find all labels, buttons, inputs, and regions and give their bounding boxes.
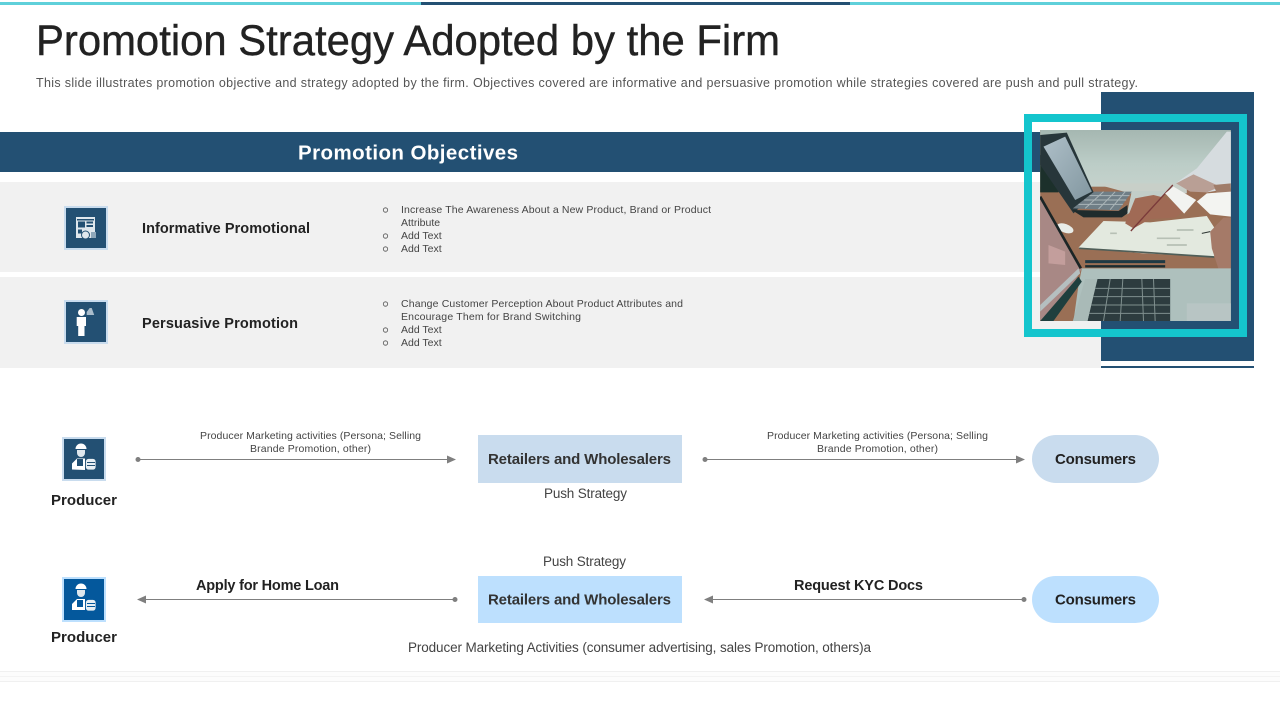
icon: media dashboard <box>64 206 108 250</box>
box: consumers: Consumers <box>1055 592 1136 608</box>
box: consumers <box>1032 576 1159 623</box>
caption: producer marketing activities right: Brande Promotion, other) <box>817 443 938 455</box>
arrow: retailers to consumers <box>702 457 1024 462</box>
bullet list: informative: Add Text <box>401 230 442 242</box>
label: persuasive promotion: Persuasive Promotion <box>142 316 298 332</box>
caption: producer marketing activities right: Producer Marketing activities (Persona; Selling <box>767 430 988 442</box>
label: producer: Producer <box>51 629 117 646</box>
box: consumers <box>1032 435 1159 483</box>
subtitle description: This slide illustrates promotion objective and strategy adopted by the firm. Objectives covered are informative and persuasive promotion while strategies covered are push and pull strategy. <box>36 76 1138 90</box>
panel: promotion objectives header <box>0 132 1101 172</box>
bullet list: persuasive <box>383 298 683 349</box>
navy backing block <box>1101 92 1254 368</box>
label: push strategy: Push Strategy <box>543 554 626 569</box>
arrow: retailers to producer <box>138 597 458 602</box>
bullet list: persuasive: Add Text <box>401 324 442 336</box>
label: producer: Producer <box>51 492 117 509</box>
box: retailers and wholesalers <box>478 576 682 623</box>
panel: informative promotional row <box>0 182 1101 272</box>
bullet list: informative: Increase The Awareness About a New Product, Brand or Product <box>401 204 711 216</box>
photo: laptops and hands writing on paper <box>1040 130 1231 321</box>
icon: producer <box>62 437 106 481</box>
icon: producer blue <box>62 577 106 622</box>
panel: persuasive promotion row <box>0 277 1101 368</box>
teal photo frame <box>1028 118 1243 333</box>
arrow: consumers to retailers <box>705 597 1026 602</box>
label: push strategy: Push Strategy <box>544 486 627 501</box>
bullet list: informative: Add Text <box>401 243 442 255</box>
box: retailers and wholesalers: Retailers and Wholesalers <box>488 592 671 608</box>
bullet list: informative: Attribute <box>401 217 440 229</box>
caption: producer marketing activities left: Brande Promotion, other) <box>250 443 371 455</box>
arrow: producer to retailers <box>136 457 455 462</box>
box: retailers and wholesalers <box>478 435 682 483</box>
caption: producer marketing activities left <box>200 430 421 455</box>
bullet list: informative <box>383 204 711 255</box>
caption: producer marketing activities: Producer Marketing Activities (consumer advertising, sales Promotion, others)a <box>408 640 871 655</box>
caption: producer marketing activities right <box>767 430 988 455</box>
bullet list: persuasive: Add Text <box>401 337 442 349</box>
panel: promotion objectives header: Promotion Objectives <box>298 142 518 164</box>
bullet list: persuasive: Encourage Them for Brand Switching <box>401 311 581 323</box>
box: retailers and wholesalers: Retailers and Wholesalers <box>488 451 671 468</box>
label: request kyc docs: Request KYC Docs <box>794 578 923 594</box>
label: apply for home loan: Apply for Home Loan <box>196 578 339 594</box>
label: informative promotional: Informative Promotional <box>142 221 310 237</box>
chart: pull strategy flow <box>51 554 1159 655</box>
bullet list: persuasive: Change Customer Perception About Product Attributes and <box>401 298 683 310</box>
icon: person with speech bubble <box>64 300 108 344</box>
chart: push strategy flow <box>51 430 1159 509</box>
top accent bar <box>0 2 1280 5</box>
box: consumers: Consumers <box>1055 451 1136 468</box>
caption: producer marketing activities left: Producer Marketing activities (Persona; Selling <box>200 430 421 442</box>
title: Promotion Strategy Adopted by the Firm <box>36 17 780 65</box>
